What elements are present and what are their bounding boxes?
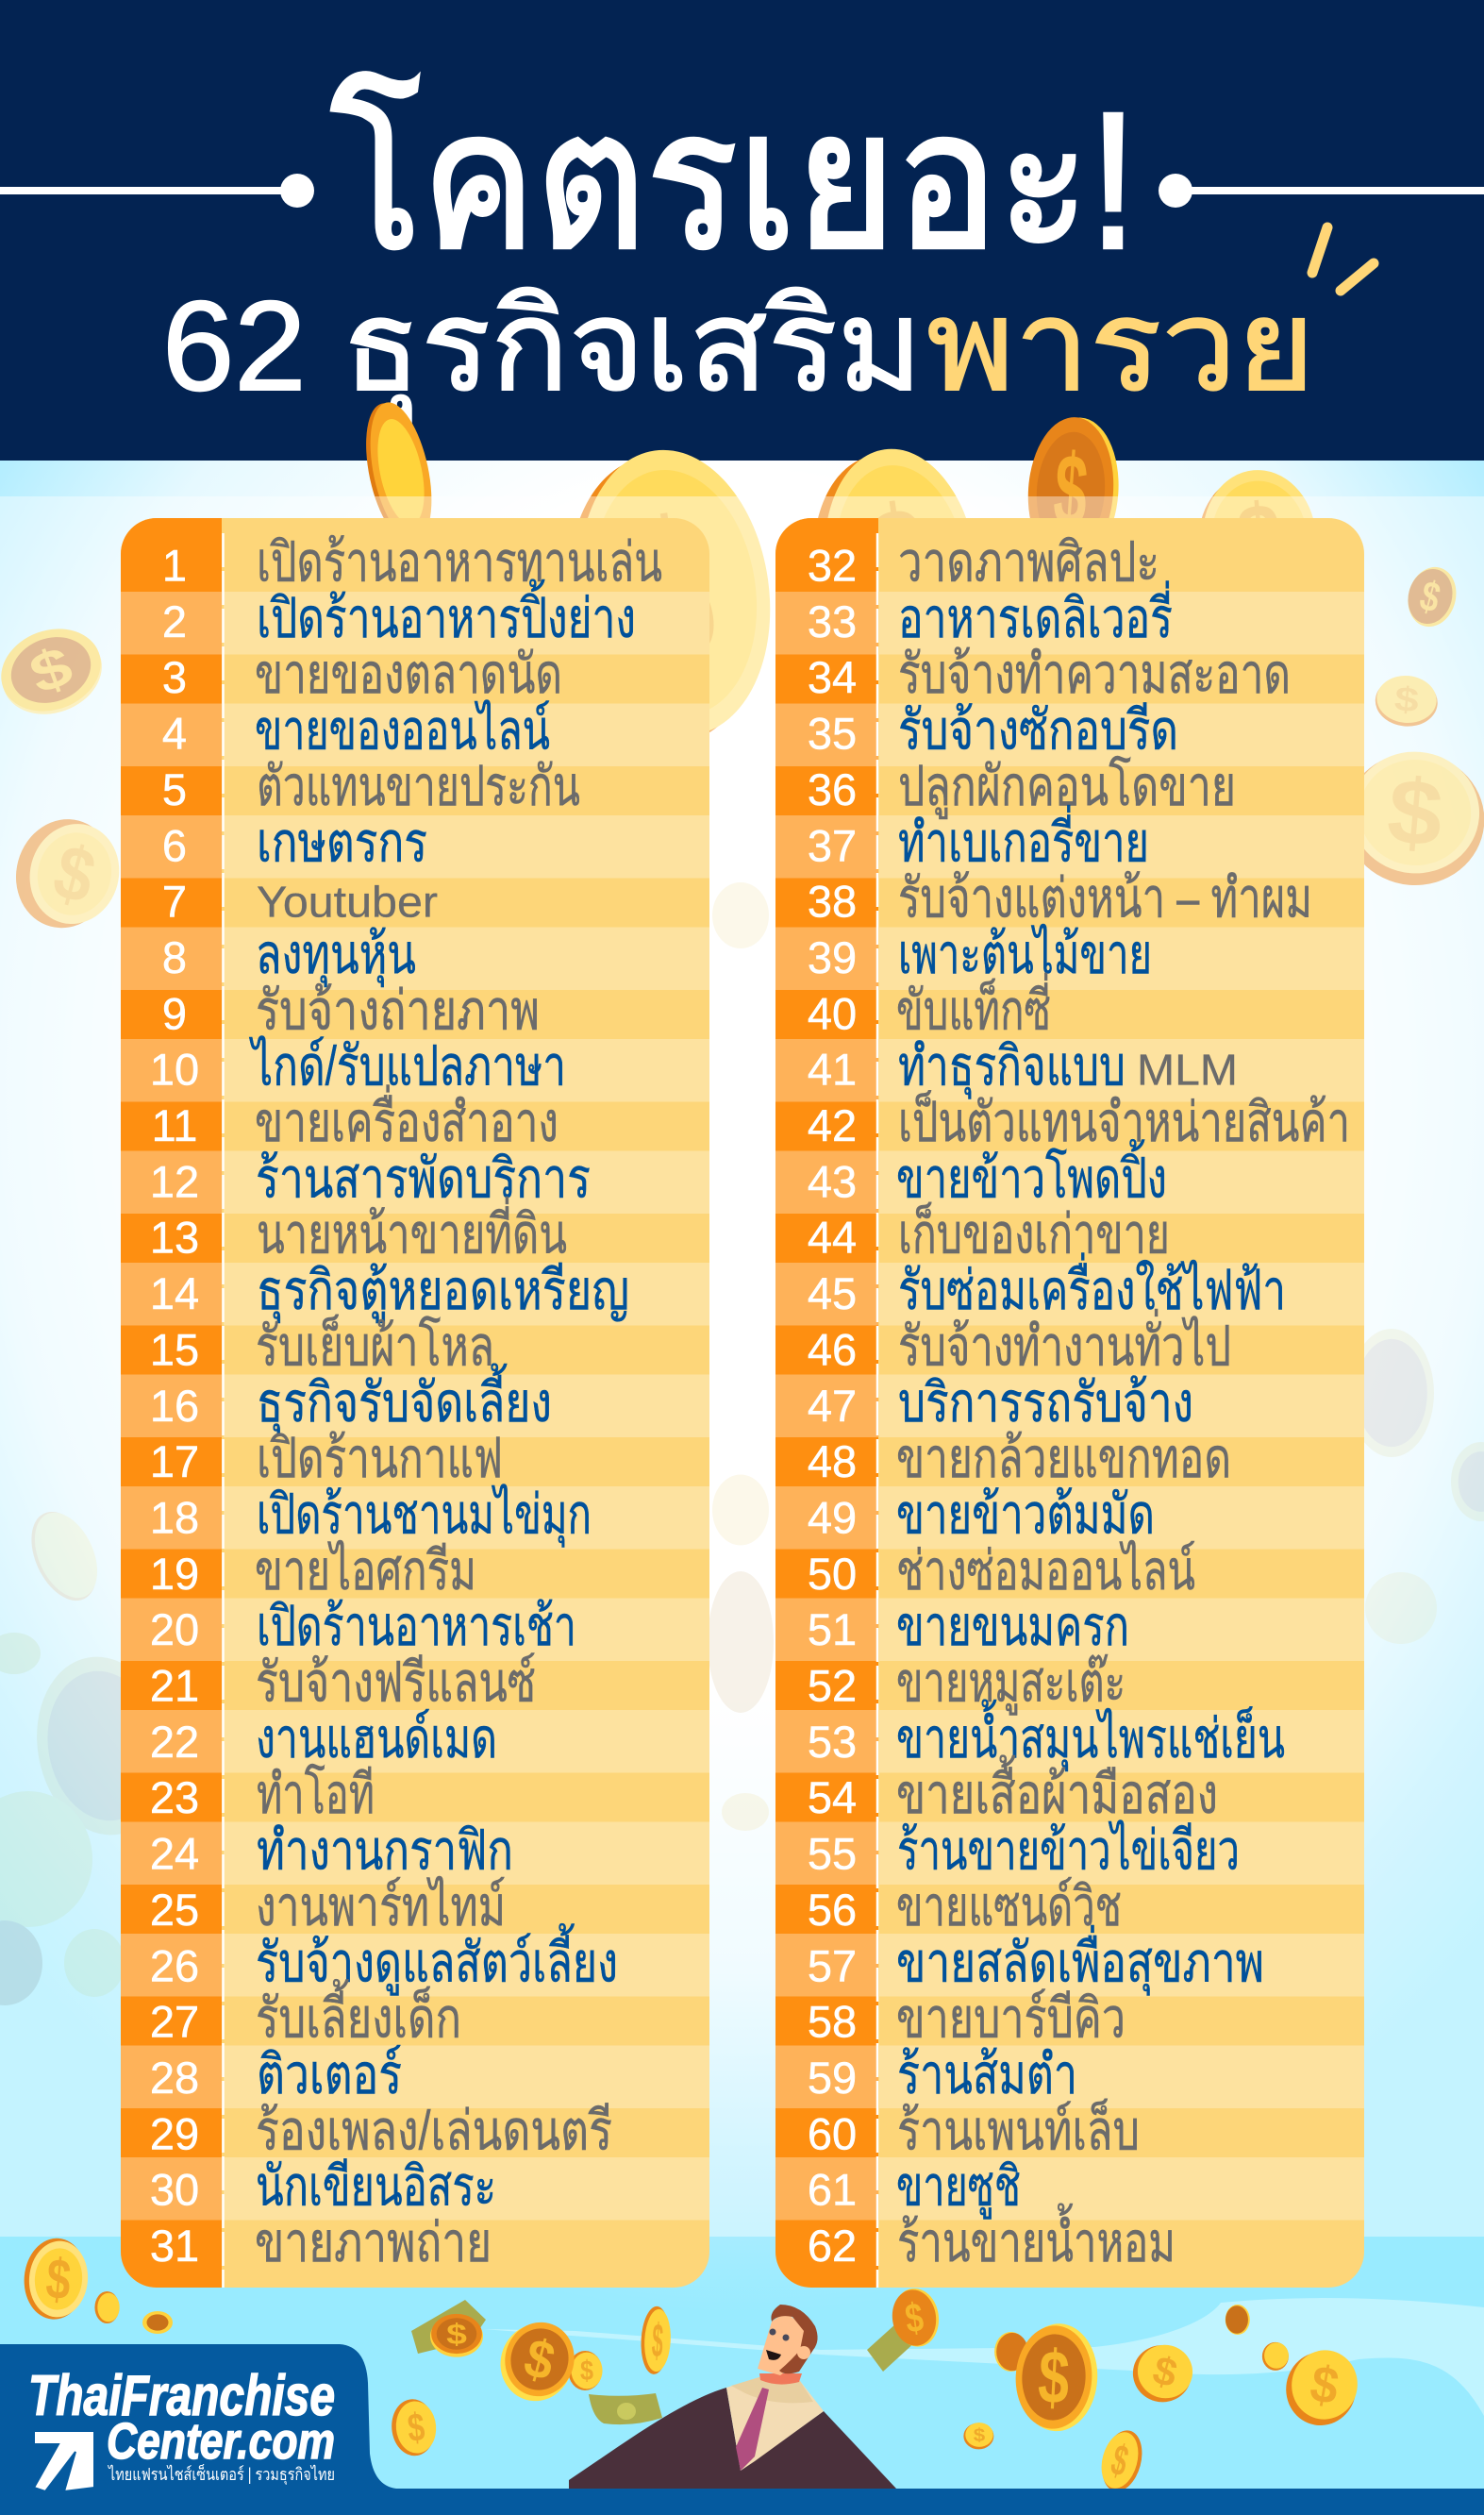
- item 21: 21: [150, 1661, 199, 1710]
- item 26: 26: [150, 1940, 199, 1990]
- item 10: [150, 1035, 566, 1098]
- item 11: ขายเครื่องสำอาง: [255, 1084, 559, 1153]
- item 14: ธุรกิจตู้หยอดเหรียญ: [257, 1260, 629, 1324]
- item 38: รับจ้างแต่งหน้า – ทำผม: [898, 868, 1312, 930]
- flying coins: $: [1107, 2436, 1133, 2487]
- item 20: [150, 1596, 576, 1657]
- item 60: 60: [808, 2108, 857, 2158]
- item 51: ขายขนมครก: [896, 1596, 1129, 1657]
- item 5: ตัวแทนขายประกัน: [257, 756, 580, 817]
- item 8: [162, 924, 416, 988]
- item 3: [162, 644, 562, 705]
- item 49: [808, 1484, 1155, 1546]
- item 25: [150, 1875, 506, 1937]
- item 47: 47: [808, 1381, 857, 1431]
- coins behind panels: $: [1233, 482, 1286, 593]
- item 15: 15: [150, 1324, 199, 1374]
- logo domain: Center.com: [107, 2413, 335, 2470]
- item 45: รับซ่อมเครื่องใช้ไฟฟ้า: [898, 1252, 1286, 1321]
- item 46: 46: [808, 1324, 857, 1374]
- item 48: 48: [808, 1436, 857, 1486]
- item 27: [150, 1980, 461, 2050]
- item 53: [808, 1700, 1285, 1772]
- item 39: [808, 923, 1152, 985]
- item 40: [808, 972, 1051, 1041]
- item 48: [808, 1428, 1231, 1489]
- item 9: 9: [162, 988, 187, 1038]
- item 30: 30: [150, 2165, 199, 2215]
- item 34: 34: [808, 652, 857, 702]
- item 44: 44: [808, 1213, 857, 1263]
- item 23: [150, 1763, 375, 1825]
- flying coins: $: [518, 2326, 561, 2392]
- item 25: 25: [150, 1885, 199, 1935]
- item 7: [162, 877, 438, 927]
- item 55: ร้านขายข้าวไข่เจียว: [897, 1819, 1240, 1882]
- item 61: 61: [808, 2165, 857, 2215]
- item 52: ขายหมูสะเต๊ะ: [896, 1652, 1126, 1716]
- item 56: ขายแซนด์วิช: [896, 1876, 1122, 1937]
- flying coins: $: [1306, 2355, 1342, 2416]
- item 13: 13: [150, 1213, 199, 1263]
- item 19: ขายไอศกรีม: [255, 1539, 476, 1601]
- faded coins: [0, 882, 1484, 2005]
- item 36: [808, 755, 1236, 819]
- item 24: [150, 1820, 513, 1882]
- item 5: [162, 756, 580, 817]
- item 11: [152, 1084, 559, 1153]
- item 14: [150, 1260, 629, 1324]
- item 32: 32: [808, 540, 857, 591]
- item 18: [150, 1484, 592, 1548]
- item 24: ทำงานกราฟิก: [257, 1820, 513, 1882]
- flying coins: $: [580, 2355, 593, 2387]
- item 19: [150, 1539, 476, 1601]
- item 29: ร้องเพลง/เล่นดนตรี: [256, 2100, 612, 2161]
- title line left: [0, 174, 314, 208]
- header band: [0, 0, 1484, 461]
- item 44: [808, 1202, 1170, 1266]
- item 18: 18: [150, 1493, 199, 1542]
- item 12: [150, 1148, 591, 1209]
- item 58: 58: [808, 1997, 857, 2047]
- item 62: 62: [808, 2221, 857, 2271]
- item 60: ร้านเพนท์เล็บ: [897, 2098, 1140, 2161]
- item 35: 35: [808, 709, 857, 759]
- item 56: [808, 1876, 1122, 1937]
- coins behind panels: $: [1415, 572, 1445, 622]
- item 48: ขายกล้วยแขกทอด: [896, 1428, 1231, 1489]
- item 46: [808, 1308, 1231, 1377]
- item 50: 50: [808, 1549, 857, 1599]
- title: พารวย: [926, 275, 1315, 417]
- item 1: เปิดร้านอาหารทานเล่น: [257, 532, 662, 593]
- coins behind panels: $: [623, 477, 726, 709]
- man: [569, 2305, 896, 2489]
- item 13: นายหน้าขายที่ดิน: [257, 1197, 567, 1266]
- item 61: [808, 2156, 1021, 2220]
- item 44: เก็บของเก่าขาย: [898, 1202, 1170, 1266]
- item 39: 39: [808, 932, 857, 982]
- item 37: [808, 804, 1149, 873]
- panel: left list: [121, 518, 709, 2288]
- item 53: 53: [808, 1717, 857, 1767]
- item 58: ขายบาร์บีคิว: [896, 1988, 1126, 2050]
- item 13: [150, 1197, 567, 1266]
- item 19: 19: [150, 1549, 199, 1599]
- item 1: 1: [162, 540, 187, 591]
- item 12: 12: [150, 1156, 199, 1206]
- item 28: 28: [150, 2053, 199, 2103]
- item 54: 54: [808, 1772, 857, 1822]
- item 7: Youtuber: [257, 878, 438, 927]
- logo badge: [0, 2344, 396, 2491]
- item 26: [150, 1923, 618, 1995]
- flying coins: $: [406, 2405, 426, 2450]
- item 22: [150, 1708, 497, 1769]
- item 38: 38: [808, 877, 857, 927]
- item 49: 49: [808, 1493, 857, 1542]
- item 54: ขายเสื้อผ้ามือสอง: [896, 1755, 1218, 1825]
- item 30: [150, 2156, 496, 2218]
- item 39: เพาะต้นไม้ขาย: [898, 923, 1152, 985]
- item 49: ขายข้าวต้มมัด: [896, 1484, 1155, 1546]
- item 17: เปิดร้านกาแฟ: [257, 1428, 503, 1489]
- item 10: ไกด์/รับแปลภาษา: [249, 1035, 566, 1098]
- flying coins: $: [974, 2425, 986, 2445]
- item 16: ธุรกิจรับจัดเลี้ยง: [257, 1364, 552, 1436]
- item 23: 23: [150, 1772, 199, 1822]
- item 33: 33: [808, 596, 857, 646]
- item 35: รับจ้างซักอบรีด: [898, 700, 1178, 762]
- left panel background: [121, 518, 709, 2288]
- item 52: 52: [808, 1661, 857, 1710]
- item 41: MLM: [1137, 1046, 1238, 1095]
- item 43: 43: [808, 1156, 857, 1206]
- item 37: 37: [808, 820, 857, 870]
- item 36: ปลูกผักคอนโดขาย: [898, 755, 1236, 819]
- flying coins: [21, 2236, 1363, 2496]
- item 7: 7: [162, 877, 187, 927]
- item 24: 24: [150, 1829, 199, 1879]
- item 25: งานพาร์ทไทม์: [256, 1875, 506, 1937]
- title line right: [1159, 174, 1484, 208]
- item 16: 16: [150, 1381, 199, 1431]
- item 62: ร้านขายน้ำหอม: [897, 2204, 1176, 2273]
- bottom bar: [0, 2489, 1484, 2515]
- item 6: [162, 812, 427, 873]
- item 31: ขายภาพถ่าย: [255, 2212, 492, 2273]
- item 43: ขายข้าวโพดปิ้ง: [896, 1139, 1167, 1209]
- item 58: [808, 1988, 1126, 2050]
- coins behind panels: $: [1392, 679, 1421, 719]
- item 30: นักเขียนอิสระ: [256, 2156, 496, 2218]
- item 52: [808, 1652, 1126, 1716]
- coins behind panels: $: [45, 829, 104, 921]
- item 45: [808, 1252, 1286, 1321]
- coins behind panels: $: [22, 635, 80, 706]
- title: [162, 73, 1315, 424]
- item 21: รับจ้างฟรีแลนซ์: [256, 1652, 536, 1714]
- item 17: 17: [150, 1436, 199, 1486]
- item 41: [808, 1036, 1238, 1100]
- flying coins: $: [1148, 2348, 1182, 2397]
- item 29: 29: [150, 2108, 199, 2158]
- item 28: ติวเตอร์: [257, 2044, 402, 2105]
- item 20: 20: [150, 1604, 199, 1654]
- item 50: [808, 1539, 1195, 1601]
- icon: arrow: [34, 2431, 94, 2491]
- item 40: ขับแท็กซี่: [896, 972, 1051, 1041]
- item 20: เปิดร้านอาหารเช้า: [257, 1596, 576, 1657]
- sky overlay: [0, 496, 1484, 2237]
- item 9: รับจ้างถ่ายภาพ: [256, 980, 540, 1041]
- panel: right list: [775, 518, 1364, 2288]
- item 41: ทำธุรกิจแบบ: [898, 1036, 1126, 1100]
- item 36: 36: [808, 764, 857, 814]
- item 6: 6: [162, 820, 187, 870]
- flying coins: $: [446, 2318, 467, 2351]
- item 11: 11: [152, 1100, 197, 1150]
- coins behind panels: [0, 397, 1484, 940]
- item 40: 40: [808, 988, 857, 1038]
- item 57: [808, 1924, 1264, 1996]
- item 16: [150, 1364, 552, 1436]
- item 41: 41: [808, 1045, 857, 1095]
- right panel background: [775, 518, 1364, 2288]
- item 47: [808, 1372, 1193, 1434]
- coins behind panels: $: [1384, 760, 1446, 866]
- item 3: ขายของตลาดนัด: [255, 644, 562, 705]
- item 34: รับจ้างทำความสะอาด: [898, 644, 1291, 705]
- item 22: งานแฮนด์เมด: [256, 1708, 497, 1769]
- coins behind panels: $: [1050, 431, 1092, 549]
- sparkle accent: [1312, 227, 1374, 291]
- item 10: 10: [150, 1045, 199, 1095]
- item 33: [808, 580, 1173, 649]
- item 46: รับจ้างทำงานทั่วไป: [898, 1308, 1231, 1377]
- money bills: [411, 2300, 917, 2424]
- item 1: [162, 532, 662, 593]
- item 2: 2: [162, 596, 187, 646]
- item 50: ช่างซ่อมออนไลน์: [896, 1539, 1195, 1601]
- item 56: 56: [808, 1885, 857, 1935]
- item 26: รับจ้างดูแลสัตว์เลี้ยง: [256, 1923, 618, 1995]
- item 35: [808, 700, 1178, 762]
- item 17: [150, 1428, 503, 1489]
- item 51: 51: [808, 1604, 857, 1654]
- item 42: เป็นตัวแทนจำหน่ายสินค้า: [898, 1090, 1350, 1153]
- item 59: ร้านส้มตำ: [897, 2044, 1077, 2105]
- item 18: เปิดร้านชานมไข่มุก: [257, 1484, 592, 1548]
- item 28: [150, 2044, 402, 2105]
- item 23: ทำโอที: [257, 1763, 375, 1825]
- item 61: ขายซูชิ: [896, 2156, 1021, 2220]
- item 59: 59: [808, 2053, 857, 2103]
- logo name: ThaiFranchise: [28, 2364, 335, 2427]
- item 4: ขายของออนไลน์: [255, 699, 550, 762]
- item 8: 8: [162, 932, 187, 982]
- item 31: [150, 2212, 492, 2273]
- item 4: 4: [162, 709, 187, 759]
- item 9: [162, 980, 540, 1041]
- item 14: 14: [150, 1268, 199, 1318]
- item 53: ขายน้ำสมุนไพรแช่เย็น: [896, 1700, 1285, 1772]
- item 22: 22: [150, 1717, 199, 1767]
- item 43: [808, 1139, 1167, 1209]
- flying coins: $: [43, 2247, 74, 2312]
- item 4: [162, 699, 550, 762]
- item 27: รับเลี้ยงเด็ก: [256, 1980, 461, 2050]
- wave highlight: [483, 2298, 1484, 2416]
- flying coins: $: [1036, 2335, 1072, 2420]
- logo tagline: ไทยแฟรนไชส์เซ็นเตอร์ | รวมธุรกิจไทย: [107, 2463, 335, 2485]
- item 31: 31: [150, 2221, 199, 2271]
- title: โคตรเยอะ!: [330, 73, 1137, 289]
- item 21: [150, 1652, 536, 1714]
- item 5: 5: [162, 764, 187, 814]
- item 57: 57: [808, 1940, 857, 1990]
- item 60: [808, 2098, 1140, 2161]
- item 15: [150, 1314, 494, 1377]
- item 55: [808, 1819, 1240, 1882]
- bottom illustration: [21, 2236, 1484, 2496]
- coins behind panels: $: [859, 471, 942, 662]
- flying coins: $: [903, 2295, 926, 2342]
- item 45: 45: [808, 1268, 857, 1318]
- item 57: ขายสลัดเพื่อสุขภาพ: [896, 1924, 1264, 1996]
- item 59: [808, 2044, 1077, 2105]
- title: 62 ธุรกิจเสริม: [162, 275, 923, 424]
- flying coins: $: [651, 2315, 664, 2368]
- item 62: [808, 2204, 1176, 2273]
- item 27: 27: [150, 1997, 199, 2047]
- item 8: ลงทุนหุ้น: [256, 924, 416, 988]
- item 34: [808, 644, 1291, 705]
- item 2: [162, 579, 636, 649]
- item 55: 55: [808, 1829, 857, 1879]
- item 33: อาหารเดลิเวอรี่: [898, 580, 1173, 649]
- item 38: [808, 868, 1312, 930]
- item 32: [808, 532, 1159, 593]
- item 15: รับเย็บผ้าโหล: [256, 1314, 494, 1377]
- item 2: เปิดร้านอาหารปิ้งย่าง: [257, 579, 636, 649]
- item 47: บริการรถรับจ้าง: [898, 1372, 1193, 1434]
- item 42: [808, 1090, 1350, 1153]
- item 32: วาดภาพศิลปะ: [898, 532, 1159, 593]
- item 54: [808, 1755, 1218, 1825]
- item 42: 42: [808, 1100, 857, 1150]
- item 12: ร้านสารพัดบริการ: [256, 1148, 591, 1209]
- item 37: ทำเบเกอรี่ขาย: [898, 804, 1149, 873]
- item 6: เกษตรกร: [257, 812, 427, 873]
- item 3: 3: [162, 652, 187, 702]
- item 29: [150, 2100, 612, 2161]
- item 51: [808, 1596, 1129, 1657]
